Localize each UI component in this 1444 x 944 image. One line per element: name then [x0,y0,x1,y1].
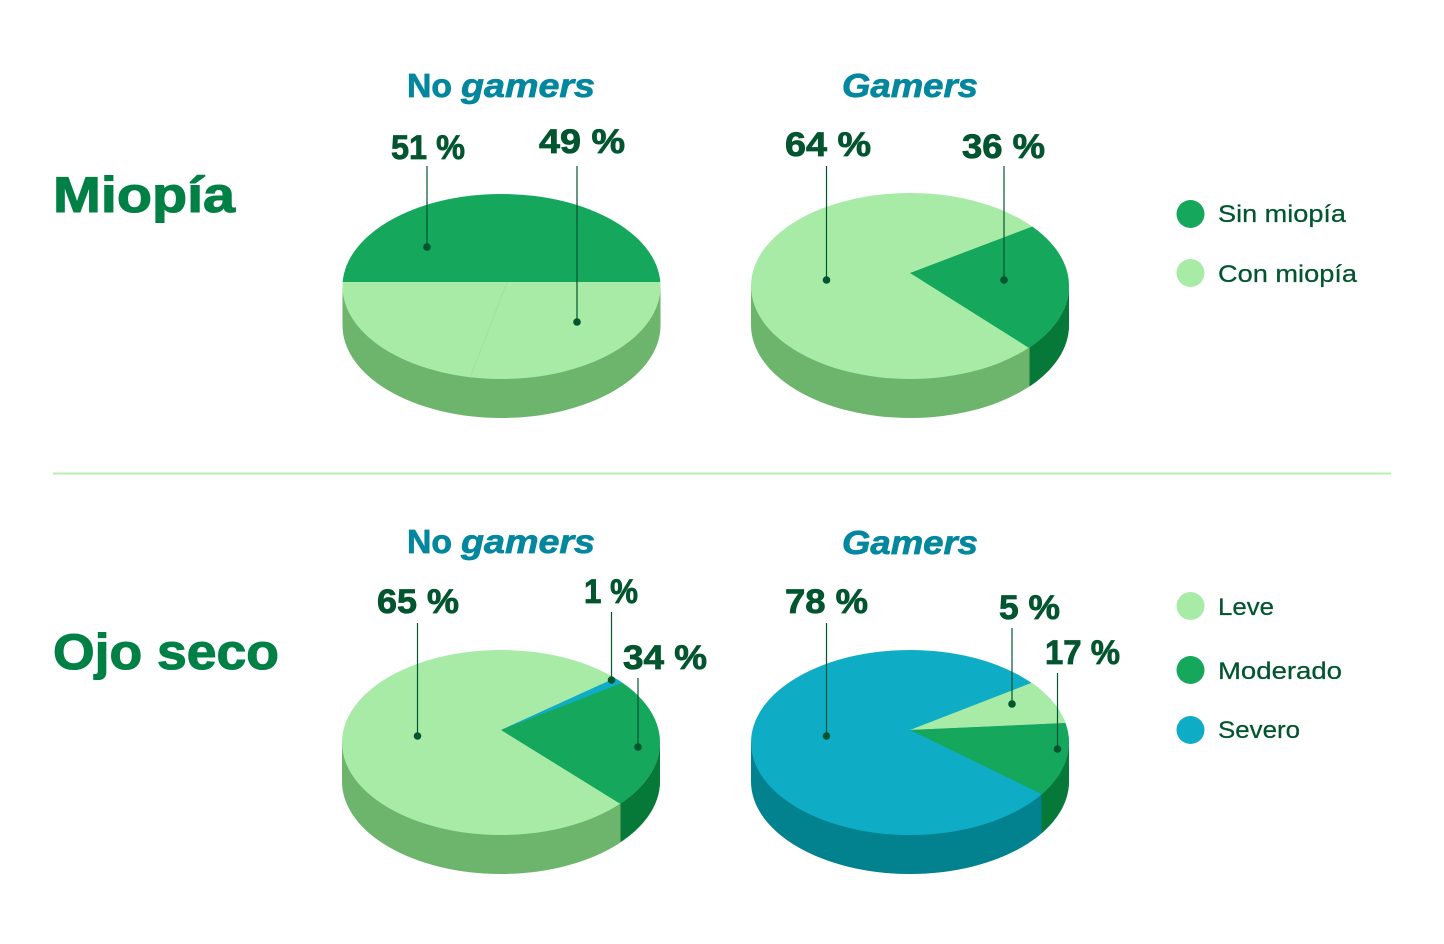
legend: miopía: Con miopía [1218,261,1358,288]
heading: No gamers (miopía): No [407,67,452,104]
label: 78 %: 78 % [785,583,868,621]
pie chart: ojo seco gamers [751,650,1090,874]
label: 5 %: 5 % [999,589,1060,627]
label: 17 %: 17 % [1045,634,1120,672]
legend: ojo seco: Leve [1218,594,1274,621]
label: 5 % [999,589,1060,708]
legend: ojo seco: Severo [1218,717,1300,744]
title: Miopía: Miopía [53,167,236,223]
title: Ojo seco: Ojo seco [53,624,279,680]
legend: ojo seco: Moderado [1218,658,1342,685]
pie chart: miopía no gamers [340,190,665,418]
label: 1 % [584,573,638,684]
label: 17 % [1045,634,1120,753]
label: 1 %: 1 % [584,573,638,611]
legend: miopía [1176,200,1358,288]
legend: miopía: Sin miopía [1218,201,1347,228]
label: 36 % [962,128,1045,284]
legend: ojo seco [1176,592,1342,744]
label: 64 %: 64 % [785,126,871,164]
heading: No gamers (ojo seco) [407,523,595,560]
label: 36 %: 36 % [962,128,1045,166]
label: 34 % [623,639,707,751]
label: 49 %: 49 % [539,123,625,161]
heading: No gamers (miopía) [407,67,595,104]
label: 49 % [539,123,625,326]
pie chart: miopía gamers [751,193,1090,418]
label: 51 %: 51 % [391,129,465,167]
label: 51 % [391,129,465,251]
label: 65 % [377,583,459,740]
heading: No gamers (ojo seco): No [407,523,452,560]
heading: No gamers (miopía): gamers [460,67,595,104]
heading: Gamers (miopía): Gamers [842,67,978,104]
label: 34 %: 34 % [623,639,707,677]
label: 78 % [785,583,868,740]
pie chart: ojo seco no gamers [342,650,680,874]
heading: Gamers (ojo seco): Gamers [842,524,978,561]
heading: No gamers (ojo seco): gamers [460,523,595,560]
label: 65 %: 65 % [377,583,459,621]
label: 64 % [785,126,871,284]
